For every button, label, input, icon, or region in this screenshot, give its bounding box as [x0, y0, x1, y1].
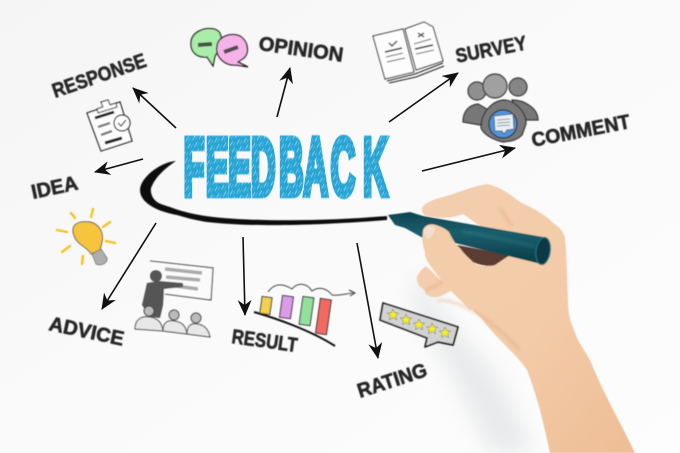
arrows: [95, 68, 515, 358]
thumbnail: [424, 226, 435, 239]
icon: star rating bubble: [380, 303, 458, 347]
arrow to response: [133, 88, 176, 128]
label: RESULT: RESULT: [230, 326, 299, 357]
arrow to idea: [95, 159, 143, 172]
marker highlight: [462, 231, 535, 246]
label: OPINION: OPINION: [257, 33, 345, 67]
icon: clipboard: [87, 100, 132, 151]
label: SURVEY: SURVEY: [454, 32, 529, 68]
hand holding marker: [388, 184, 635, 453]
arrow to result: [243, 237, 245, 315]
arrow to comment: [422, 148, 515, 171]
icon: speech bubbles: [191, 29, 248, 67]
icon: bar chart result: [254, 284, 355, 346]
label: IDEA: IDEA: [29, 173, 80, 204]
title: FEEDBACK: FEEDBACK: [184, 122, 388, 213]
label: RATING: RATING: [355, 360, 430, 403]
icon: open book survey: [373, 22, 444, 83]
label: RESPONSE: RESPONSE: [49, 50, 149, 103]
hand back and wrist: [417, 184, 635, 453]
label: COMMENT: COMMENT: [530, 111, 632, 152]
label: ADVICE: ADVICE: [47, 313, 126, 351]
shaded gap under marker: [457, 245, 510, 266]
marker pen: [388, 212, 548, 264]
arrow to advice: [102, 223, 156, 309]
arrow to opinion: [277, 68, 290, 117]
finger creases: [425, 208, 520, 350]
icon: light bulb: [57, 209, 115, 265]
icon: people with comment: [463, 74, 538, 142]
hand shadow: [412, 270, 535, 453]
icon: presenter with audience: [135, 261, 213, 337]
arrow to survey: [389, 73, 458, 122]
thumb: [422, 224, 520, 310]
arrow to rating: [357, 243, 378, 358]
swoosh underline: [140, 161, 387, 225]
marker end cap: [534, 237, 552, 265]
